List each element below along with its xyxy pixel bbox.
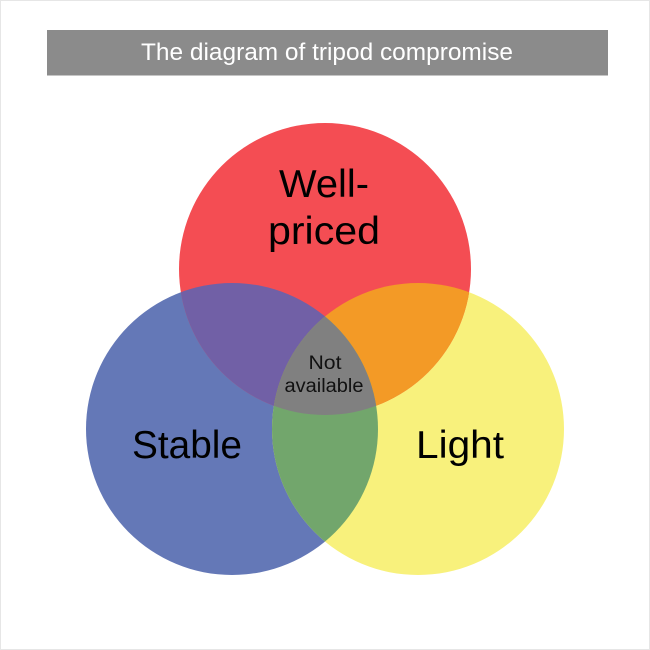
label: stable: Stable [132, 424, 242, 467]
overlap: centre [274, 316, 376, 415]
circle: well-priced [179, 123, 471, 415]
title [47, 30, 608, 76]
label: well-priced: priced [268, 210, 380, 253]
venn diagram [86, 123, 564, 575]
label: not available: available [284, 376, 364, 397]
title: The diagram of tripod compromise [141, 39, 513, 66]
overlap: well-priced and light [274, 283, 470, 406]
overlap: stable and light [272, 316, 378, 542]
overlap: well-priced and stable [181, 283, 325, 406]
circle: stable [86, 283, 378, 575]
circle: light [272, 283, 564, 575]
label: well-priced: Well- [279, 163, 369, 206]
label: light: Light [416, 424, 504, 467]
label: not available: Not [308, 353, 342, 374]
